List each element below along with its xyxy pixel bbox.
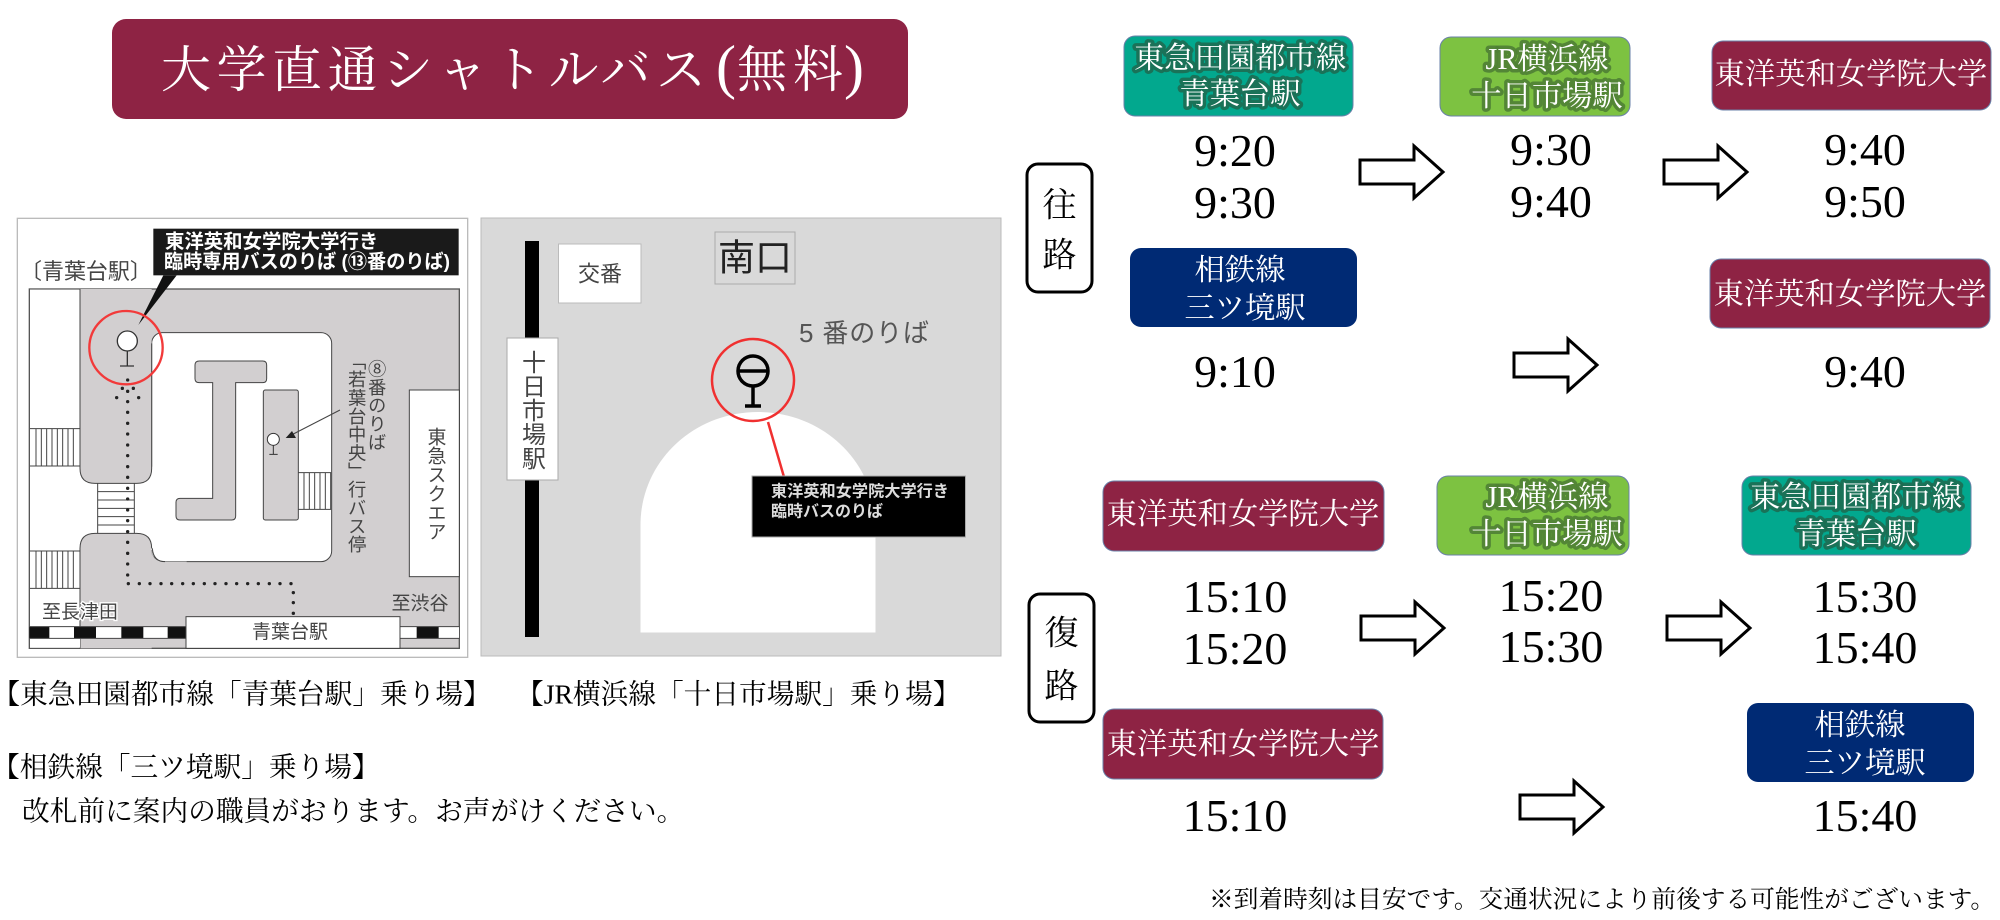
station: Aobadai outbound: 青葉台駅 [1179,77,1301,111]
station: Tokaichiba outbound [1440,37,1630,116]
station: Mitsukyo return: 相鉄線 [1815,708,1905,742]
title banner: 大学直通シャトルバス [161,42,706,98]
station: university outbound: 東洋英和女学院大学 [1715,57,1987,91]
times: university outbound: 9:40 [1824,124,1906,175]
times: Aobadai return: 15:30 [1813,571,1917,622]
panel: Aobadai station map [17,218,468,657]
label: return [1029,594,1094,722]
station: Tokaichiba outbound: JR横浜線 [1486,42,1608,76]
red ring [712,339,794,421]
times: Aobadai return: 15:40 [1813,622,1917,673]
label: outbound: 往 [1042,188,1076,224]
label: outbound [1027,164,1092,292]
small bus stop no. 8 [267,433,279,454]
time: university return 2: 15:10 [1183,790,1287,841]
station: Tokaichiba return [1437,476,1629,555]
times: Tokaichiba outbound: 9:40 [1510,176,1592,227]
times: university outbound: 9:50 [1824,176,1906,227]
arrow [1360,146,1443,198]
label: 青葉台駅 heading: 〔青葉台駅〕 [20,259,152,284]
police box 交番: 交番 [578,262,622,286]
callout: temporary bus stop [138,229,459,325]
station: university outbound 2 [1710,259,1990,328]
station: Aobadai outbound [1124,36,1353,116]
label: stop no. 8 vertical text [346,352,387,553]
station: Tokaichiba return: 十日市場駅 [1471,517,1623,551]
arrow [1664,146,1747,198]
title banner [112,19,908,119]
caption: Aobadai boarding: 【東急田園都市線「青葉台駅」乗り場】 [0,678,491,710]
東急スクエア building: 東急スクエア [424,426,446,541]
station: Tokaichiba return: JR横浜線 [1486,480,1608,514]
times: Tokaichiba return [1499,570,1603,672]
times: Tokaichiba outbound: 9:30 [1510,124,1592,175]
station: university return [1103,481,1384,551]
station: Mitsukyo outbound: 相鉄線 [1195,253,1285,287]
station: Aobadai return: 東急田園都市線 [1750,480,1962,514]
label 南口: 南口 [718,238,792,278]
title banner: ) [844,34,864,100]
times: Tokaichiba return: 15:20 [1499,570,1603,621]
arrow to stop no. 8 [286,410,340,438]
station: university outbound [1712,41,1991,110]
bus stop marker with red ring [89,311,163,384]
title banner: 無料 [737,42,843,98]
title banner: ( [716,34,736,100]
time: university outbound 2: 9:40 [1824,346,1906,397]
callout: temporary bus stop: 東洋英和女学院大学行き [771,482,949,500]
station label 十日市場駅 [507,338,558,480]
station: Aobadai return [1742,476,1971,555]
arrow [1361,602,1444,654]
station: Mitsukyo outbound: 三ツ境駅 [1184,291,1306,325]
station: Aobadai outbound: 東急田園都市線 [1134,41,1346,75]
times: university outbound [1824,124,1906,227]
label: stop no. 8 vertical text: ⑧番のりば [366,359,387,451]
callout: temporary bus stop: 臨時専用バスのりば (⑬番のりば) [164,251,450,273]
arrow [1667,602,1750,654]
station: university outbound 2: 東洋英和女学院大学 [1714,277,1986,311]
label: return: 路 [1044,668,1078,706]
callout: temporary bus stop: 臨時バスのりば [771,502,883,520]
rail band [29,627,459,648]
station: Mitsukyo outbound [1130,248,1357,327]
station: Mitsukyo return: 三ツ境駅 [1804,746,1926,780]
caption: Tokaichiba boarding: 【JR横浜線「十日市場駅」乗り場】 [516,678,961,710]
station building label: 青葉台駅 [252,621,328,643]
times: Aobadai outbound: 9:20 [1194,125,1276,176]
station: Aobadai return: 青葉台駅 [1795,517,1917,551]
arrow [1514,339,1597,391]
bus stop icon [738,356,768,406]
times: Aobadai return [1813,571,1917,673]
station label 十日市場駅: 十日市場駅 [518,350,546,470]
map base [29,289,459,648]
times: Tokaichiba return: 15:30 [1499,621,1603,672]
station: Mitsukyo return [1747,703,1974,782]
callout: temporary bus stop: 東洋英和女学院大学行き [165,230,378,253]
label: return: 復 [1044,614,1078,652]
times: Aobadai outbound: 9:30 [1194,177,1276,228]
footnote: ※到着時刻は目安です。交通状況により前後する可能性がございます。 [1209,886,1995,914]
arrow [1520,781,1603,833]
text: staff notice: 改札前に案内の職員がおります。お声がけください。 [22,796,684,826]
station building label [186,617,400,648]
time: Mitsukyo return: 15:40 [1813,790,1917,841]
label: 至長津田: 至長津田 [42,601,118,623]
times: university return: 15:10 [1183,571,1287,622]
station: university return 2: 東洋英和女学院大学 [1107,727,1379,761]
caption: Mitsukyo boarding: 【相鉄線「三ツ境駅」乗り場】 [0,752,380,782]
crosswalks [30,429,331,588]
times: university return [1183,571,1287,674]
label: stop no. 8 vertical text: 「若葉台中央」行バス停 [346,352,367,553]
times: Tokaichiba outbound [1510,124,1592,227]
station: Tokaichiba outbound: 十日市場駅 [1471,79,1623,113]
time: Mitsukyo outbound: 9:10 [1194,346,1276,397]
東急スクエア building [409,390,459,577]
label: 至渋谷: 至渋谷 [392,592,448,614]
station: university return: 東洋英和女学院大学 [1107,497,1379,531]
white arch [640,412,876,632]
station: university return 2 [1103,709,1383,779]
walking route dots [115,378,295,615]
leader line [768,422,784,477]
times: university return: 15:20 [1183,623,1287,674]
label 5番のりば: 5 番のりば [799,318,929,348]
label: outbound: 路 [1042,236,1076,274]
panel: Tokaichiba station map [481,218,1001,656]
times: Aobadai outbound [1194,125,1276,228]
police box 交番 [558,244,641,303]
callout: temporary bus stop [752,476,966,537]
bus rotary islands [176,361,298,520]
rail line [525,241,539,637]
